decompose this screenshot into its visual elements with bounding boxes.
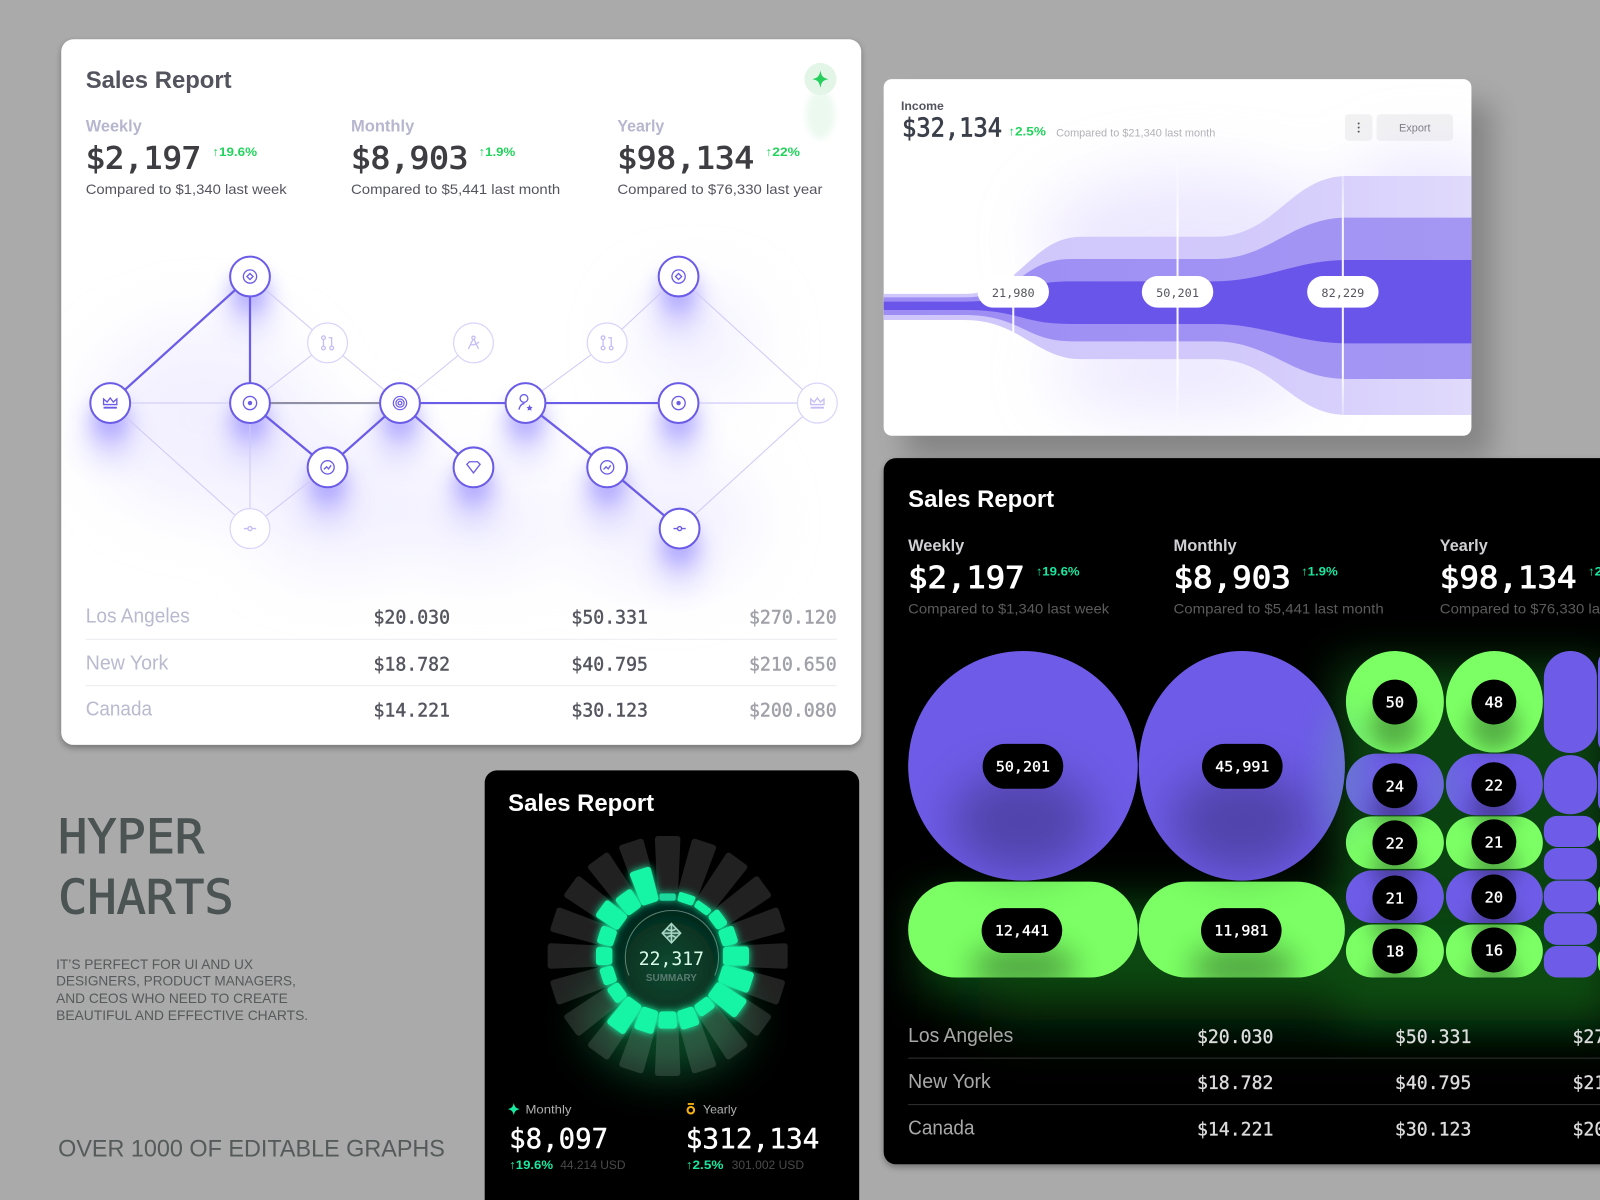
title: hyper charts — [58, 810, 234, 925]
badge: 45,991: 45,991 — [1215, 759, 1269, 775]
table: regional sales — [86, 605, 837, 721]
radial bar chart — [551, 839, 785, 1077]
stat: radial yearly: $312,134 — [686, 1123, 819, 1155]
stat: dark weekly: $2,197 — [908, 561, 1024, 596]
node: crown faint — [797, 383, 837, 423]
badge: 50,201: 50,201 — [996, 759, 1050, 775]
income header: Income — [901, 99, 944, 113]
panel: dark sales report bubbles — [884, 458, 1600, 1167]
export button: Export — [1399, 123, 1431, 135]
node: dot target right — [659, 383, 698, 423]
small badges: 24 — [1386, 777, 1404, 795]
centre arc — [625, 910, 719, 976]
small badges: 18 — [1386, 943, 1404, 961]
stat: radial yearly: ↑2.5% — [686, 1158, 724, 1172]
stat: dark yearly — [1440, 537, 1600, 617]
stat: radial yearly — [686, 1102, 819, 1172]
badge: 50,201 — [983, 744, 1063, 789]
panel: white sales report network — [61, 39, 861, 748]
small badges: 16 — [1485, 942, 1503, 960]
income header: Compared to $21,340 last month — [1056, 128, 1215, 140]
badge: 11,981 — [1201, 908, 1282, 953]
stat: radial monthly: ↑19.6% — [509, 1158, 553, 1172]
stat: yearly: $98,134 — [617, 141, 754, 176]
stat: weekly: Weekly — [86, 118, 142, 136]
pill: 21,980: 21,980 — [992, 286, 1035, 300]
bubble treemap — [908, 651, 1600, 998]
stat: dark monthly — [1173, 537, 1384, 617]
pill: 21,980 — [978, 276, 1049, 308]
table: regional sales: $50.331 — [571, 607, 648, 628]
node: compass faint — [454, 323, 493, 363]
table: dark regional sales — [908, 1025, 1600, 1141]
panel: dark radial summary — [485, 770, 859, 1200]
table: dark regional sales: $40.795 — [1395, 1073, 1471, 1094]
stat: monthly: $8,903 — [351, 141, 468, 176]
pill: 50,201: 50,201 — [1156, 286, 1199, 300]
node: slider active — [660, 509, 699, 548]
description text: IT’S PERFECT FOR UI AND UX — [56, 957, 254, 973]
stat: monthly: Compared to $5,441 last month — [351, 182, 560, 198]
income header — [902, 102, 1215, 141]
export button — [1377, 114, 1453, 141]
table: dark regional sales: Los Angeles — [908, 1025, 1013, 1047]
stat: weekly — [86, 118, 288, 198]
small badges: 50 — [1386, 694, 1404, 712]
badge: 11,981: 11,981 — [1214, 924, 1268, 940]
table: dark regional sales: New York — [908, 1071, 992, 1093]
small badges: 48 — [1485, 694, 1503, 712]
badge: 12,441 — [982, 908, 1062, 953]
table: regional sales: $30.123 — [571, 700, 648, 721]
pill: 50,201 — [1142, 276, 1213, 308]
small badges: 20 — [1485, 889, 1503, 907]
stat: radial yearly: Yearly — [703, 1102, 738, 1116]
node: trend left — [308, 447, 347, 487]
stat: radial monthly: $8,097 — [509, 1123, 608, 1155]
small badges: 22 — [1386, 834, 1404, 852]
stat: weekly: ↑19.6% — [212, 145, 257, 159]
panel: income sankey — [884, 79, 1510, 459]
table: regional sales: New York — [86, 652, 169, 674]
icon: summary diamond — [662, 923, 681, 943]
node: gem — [454, 447, 493, 487]
small badges: 22 — [1485, 776, 1503, 794]
table: regional sales: $210.650 — [749, 654, 837, 675]
icon: green sparkle — [804, 63, 836, 139]
stat: radial yearly: 301.002 USD — [732, 1158, 804, 1172]
stat: dark weekly: Compared to $1,340 last week — [908, 601, 1110, 617]
pill: 82,229: 82,229 — [1321, 286, 1364, 300]
menu button — [1345, 114, 1372, 141]
node: crown — [90, 383, 130, 423]
node: dot target left — [230, 383, 270, 423]
table: dark regional sales: $18.782 — [1197, 1073, 1273, 1094]
table: dark regional sales: $50.331 — [1395, 1027, 1471, 1048]
table: regional sales: $270.120 — [749, 607, 837, 628]
income header: ↑2.5% — [1008, 125, 1046, 139]
badge: 45,991 — [1202, 744, 1283, 789]
table: regional sales: $18.782 — [373, 654, 450, 675]
node: diamond target right — [659, 257, 698, 296]
summary value: 22,317 — [639, 949, 704, 970]
stat: radial monthly: Monthly — [526, 1102, 572, 1116]
stat: dark monthly: $8,903 — [1173, 561, 1291, 596]
heading: radial sales report: Sales Report — [508, 790, 654, 817]
stat: dark monthly: Compared to $5,441 last month — [1173, 601, 1384, 617]
title: hyper charts: CHARTS — [58, 870, 234, 925]
stat: yearly: ↑22% — [765, 145, 800, 159]
stat: dark monthly: Monthly — [1173, 537, 1237, 555]
small badges — [1372, 680, 1516, 973]
stat: radial monthly — [508, 1102, 626, 1172]
node: branches faint left — [308, 323, 347, 363]
stat: dark weekly — [908, 537, 1110, 617]
stat: monthly: Monthly — [351, 118, 414, 136]
node: branches faint right — [587, 323, 627, 363]
stat: dark weekly: Weekly — [908, 537, 964, 555]
stat: weekly: $2,197 — [86, 141, 201, 176]
stat: radial monthly: 44.214 USD — [560, 1158, 626, 1172]
table: regional sales: Los Angeles — [86, 605, 190, 627]
node: slider faint — [230, 509, 270, 548]
heading: dark sales report: Sales Report — [908, 486, 1054, 513]
node: trend right — [587, 447, 627, 487]
badge: 12,441: 12,441 — [995, 924, 1049, 940]
network chart — [88, 257, 837, 587]
stat: yearly: Yearly — [617, 118, 664, 136]
table: dark regional sales: Canada — [908, 1118, 975, 1140]
table: regional sales: $200.080 — [749, 700, 837, 721]
income header: $32,134 — [902, 114, 1002, 144]
table: dark regional sales: $30.123 — [1395, 1120, 1471, 1141]
tagline: OVER 1000 OF EDITABLE GRAPHS — [58, 1136, 445, 1163]
description text: BEAUTIFUL AND EFFECTIVE CHARTS. — [56, 1008, 308, 1024]
description text — [56, 957, 308, 1024]
small badges: 21 — [1386, 890, 1404, 908]
sankey chart — [884, 153, 1510, 429]
table: regional sales: $40.795 — [571, 654, 648, 675]
table: dark regional sales: $20.030 — [1197, 1027, 1273, 1048]
stat: dark yearly: Yearly — [1440, 537, 1488, 555]
description text: AND CEOS WHO NEED TO CREATE — [56, 991, 288, 1007]
heading: sales report: Sales Report — [86, 67, 232, 94]
table: regional sales: Canada — [86, 698, 153, 720]
stat: dark monthly: ↑1.9% — [1301, 565, 1338, 579]
node: diamond target left — [230, 257, 270, 296]
stat: yearly — [617, 118, 823, 198]
description text: DESIGNERS, PRODUCT MANAGERS, — [56, 974, 296, 990]
stat: monthly — [351, 118, 560, 198]
table: regional sales: $14.221 — [373, 700, 450, 721]
table: dark regional sales: $14.221 — [1197, 1120, 1273, 1141]
title: hyper charts: HYPER — [58, 810, 205, 865]
table: regional sales: $20.030 — [373, 607, 450, 628]
stat: weekly: Compared to $1,340 last week — [86, 182, 288, 198]
stat: monthly: ↑1.9% — [479, 145, 515, 159]
pill: 82,229 — [1307, 276, 1379, 308]
stat: dark weekly: ↑19.6% — [1036, 565, 1080, 579]
stat: yearly: Compared to $76,330 last year — [617, 182, 823, 198]
node: concentric target — [380, 383, 420, 423]
small badges: 21 — [1485, 833, 1503, 851]
node: person star — [506, 383, 545, 423]
summary label: SUMMARY — [646, 973, 697, 984]
stat: dark yearly: $98,134 — [1440, 561, 1577, 596]
